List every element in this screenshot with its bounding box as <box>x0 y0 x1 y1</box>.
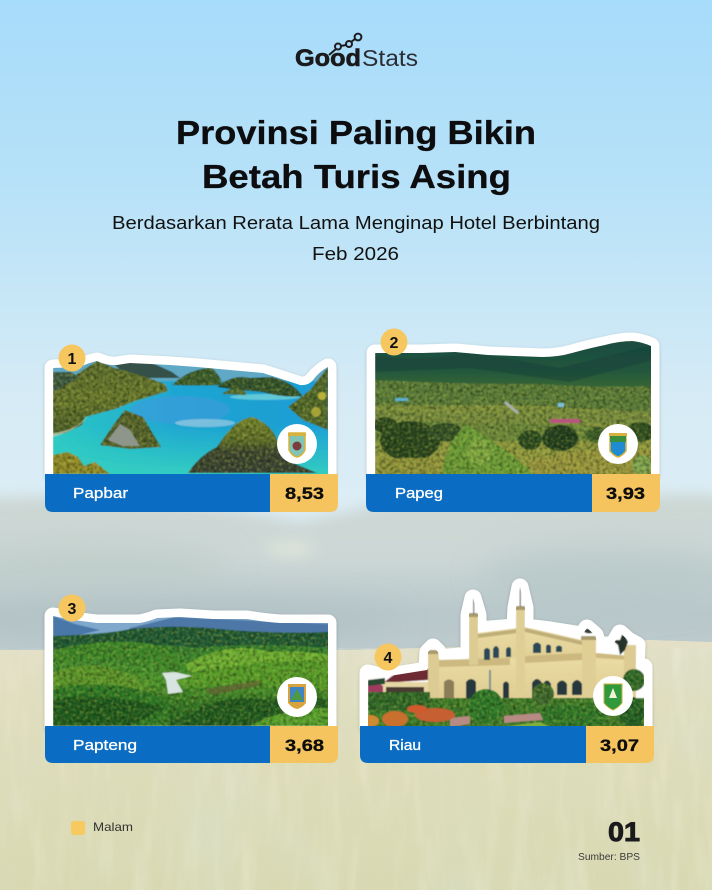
logo: GoodStats: Good <box>295 45 361 72</box>
panel: card 1 Papbar <box>45 344 338 512</box>
sticker outline <box>53 361 328 474</box>
bar: province name <box>366 474 592 512</box>
logo: GoodStats <box>295 34 418 72</box>
rank badge 3 <box>58 594 86 622</box>
photo: Raja Ampat lagoon <box>53 355 329 475</box>
legend: Malam: Malam <box>93 820 133 834</box>
panel: card 3 Papteng: 3,68 <box>285 737 324 755</box>
panel: card 2 Papeg: Papeg <box>395 485 443 502</box>
subtitle <box>112 213 600 264</box>
value box <box>586 726 654 763</box>
panel: card 4 Riau <box>360 580 654 763</box>
sticker outline <box>53 616 328 726</box>
source: Sumber: BPS <box>578 851 640 863</box>
panel: card 1 Papbar: 1 <box>68 351 77 368</box>
bar: province name <box>360 726 586 763</box>
title: Betah Turis Asing <box>202 158 511 195</box>
rank badge 2 <box>380 328 408 356</box>
panel: card 4 Riau: 4 <box>384 650 393 667</box>
logo: GoodStats: Stats <box>362 45 418 71</box>
subtitle: Feb 2026 <box>312 244 399 264</box>
panel: card 4 Riau: 3,07 <box>600 737 639 755</box>
sticker outline <box>375 341 651 474</box>
title: Provinsi Paling Bikin <box>176 114 536 151</box>
rank badge 4 <box>374 644 402 670</box>
panel: card 1 Papbar: 8,53 <box>285 485 324 503</box>
photo: green rolling hills <box>53 610 329 726</box>
bar: province name <box>45 726 270 763</box>
panel: card 3 Papteng: 3 <box>68 601 77 618</box>
panel: card 3 Papteng: Papteng <box>73 737 137 754</box>
logo: Papua Barat emblem <box>277 424 317 464</box>
panel: card 4 Riau: Riau <box>389 737 421 754</box>
panel: card 2 Papeg <box>366 328 660 512</box>
panel: card 1 Papbar: Papbar <box>73 485 128 502</box>
rank badge 1 <box>58 344 86 372</box>
panel: card 2 Papeg: 3,93 <box>606 485 645 503</box>
panel: card 2 Papeg: 2 <box>390 335 399 352</box>
photo: highland valley <box>373 340 654 475</box>
subtitle: Berdasarkan Rerata Lama Menginap Hotel Berbintang <box>112 213 600 233</box>
logo: Papua Tengah emblem <box>277 677 317 717</box>
sticker outline <box>368 587 644 726</box>
value box <box>592 474 660 512</box>
logo graph line icon <box>329 34 361 55</box>
legend: Malam <box>71 820 133 835</box>
panel: card 3 Papteng <box>45 594 338 763</box>
bar: province name <box>45 474 270 512</box>
photo: Siak palace <box>361 580 645 727</box>
logo: Riau emblem <box>593 676 633 716</box>
title <box>176 114 536 195</box>
page number: 01 <box>608 817 640 847</box>
value box <box>270 474 338 512</box>
logo: Papua Pegunungan emblem <box>598 424 638 464</box>
value box <box>270 726 338 763</box>
